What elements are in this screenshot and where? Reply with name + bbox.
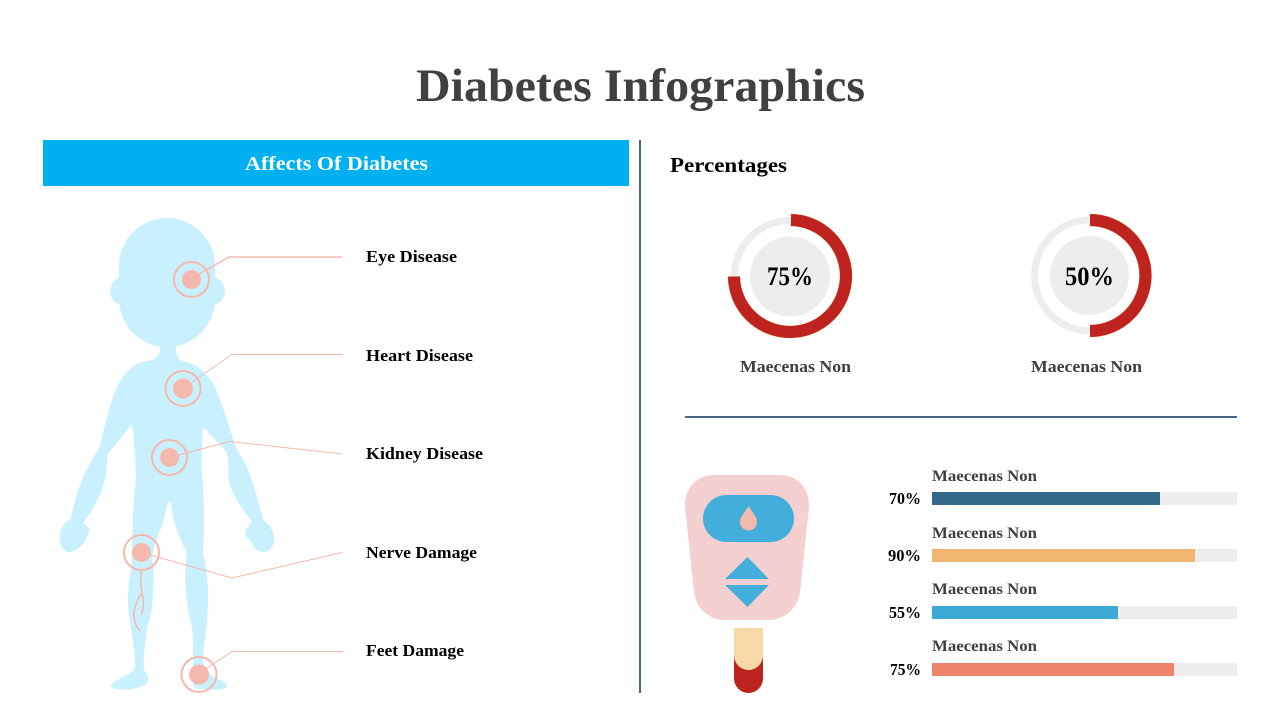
donut chart: 75%: 75% — [767, 262, 813, 291]
bar: 70% — [889, 468, 1237, 508]
bar: 70%: 70% — [889, 489, 921, 508]
label: eye disease: Eye Disease — [366, 247, 457, 266]
icon: finger with blood — [734, 628, 763, 693]
donut chart: 50%: 50% — [1065, 262, 1114, 291]
bar: 90% — [888, 525, 1237, 565]
bar: 75%: 75% — [890, 660, 921, 679]
marker: nerve — [124, 535, 342, 631]
label: heart disease: Heart Disease — [366, 346, 473, 365]
bar: 75% — [890, 638, 1237, 679]
vertical divider — [639, 140, 641, 693]
label: feet damage: Feet Damage — [366, 641, 464, 660]
panel: body diagram — [60, 218, 343, 692]
bar: 55%: Maecenas Non — [932, 581, 1037, 598]
marker: heart — [166, 354, 343, 406]
title: Diabetes Infographics — [416, 60, 865, 112]
marker: eye — [174, 257, 342, 297]
marker: feet — [182, 652, 343, 692]
heading: percentages: Percentages — [670, 153, 787, 177]
label: nerve damage: Nerve Damage — [366, 543, 477, 562]
bar: 70%: Maecenas Non — [932, 468, 1037, 485]
bar: 55% — [889, 581, 1237, 622]
bar: 75%: Maecenas Non — [932, 638, 1037, 655]
marker: kidney — [152, 440, 342, 475]
caption: donut 2: Maecenas Non — [1031, 357, 1142, 376]
donut chart: 50% — [1034, 220, 1146, 331]
caption: donut 1: Maecenas Non — [740, 357, 851, 376]
bar: 90%: 90% — [888, 546, 921, 565]
donut chart: 75% — [734, 220, 846, 332]
bar: 90%: Maecenas Non — [932, 525, 1037, 542]
panel: affects of diabetes header — [43, 140, 629, 186]
label: kidney disease: Kidney Disease — [366, 444, 483, 463]
icon: glucose meter — [685, 475, 809, 693]
panel: affects of diabetes header: Affects Of Diabetes — [245, 153, 428, 175]
bar chart — [888, 468, 1237, 679]
icon: human body silhouette — [60, 218, 274, 690]
bar: 55%: 55% — [889, 603, 921, 622]
horizontal divider — [685, 416, 1237, 418]
